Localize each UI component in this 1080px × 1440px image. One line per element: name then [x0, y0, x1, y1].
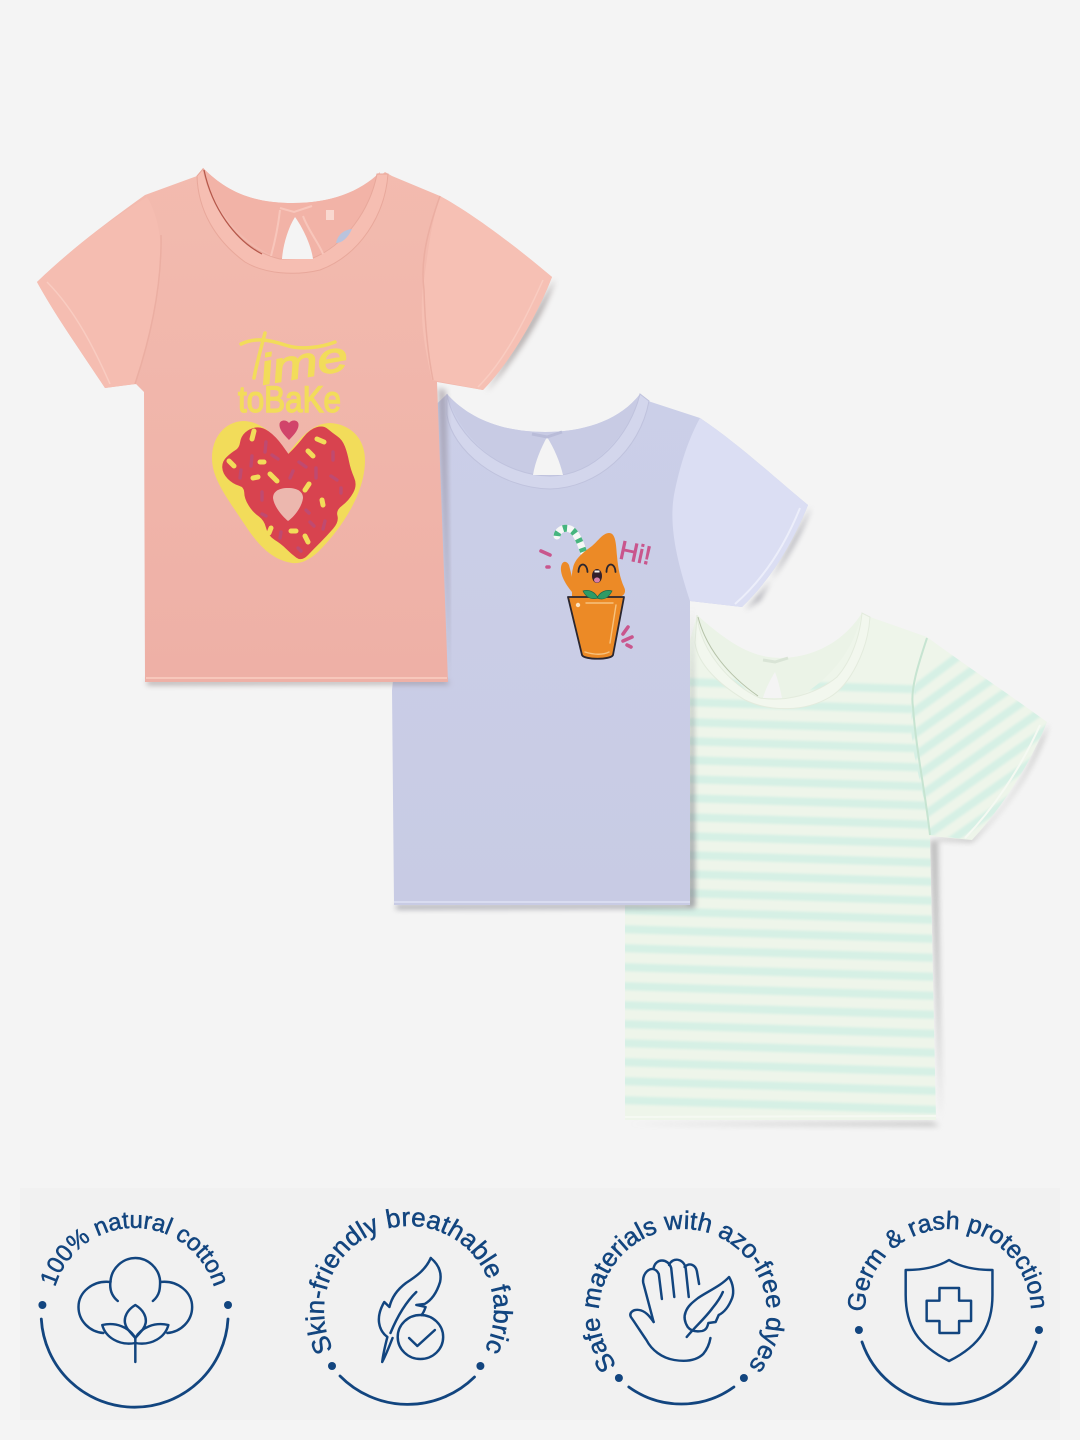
donut and lettering artwork	[212, 332, 365, 563]
mint back neck	[697, 613, 862, 698]
yellow sprinkles	[229, 431, 324, 542]
lavender sleeve	[672, 418, 808, 607]
size tag	[326, 210, 334, 220]
circular label: Germ & rash protection	[848, 1210, 1044, 1310]
Time to Bake lettering	[238, 332, 351, 420]
badge: safe materials with azo-free dyes	[582, 1210, 785, 1406]
circular label: Skin-friendly breathable fabric	[305, 1208, 514, 1354]
lavender back neck	[447, 394, 640, 478]
glass	[568, 597, 624, 659]
mint striped t-shirt	[620, 613, 1060, 1126]
small heart	[279, 420, 299, 440]
yellow heart	[212, 421, 365, 563]
icon: cotton boll	[79, 1258, 192, 1362]
Time to Bake lettering: toBaKe	[238, 379, 341, 420]
face	[578, 564, 616, 572]
keyhole	[282, 217, 313, 259]
lavender t-shirt	[392, 394, 811, 909]
panel: badge strip background	[20, 1188, 1060, 1420]
purple sprinkles	[240, 442, 341, 551]
lavender collar	[447, 394, 649, 489]
pink accent marks	[541, 551, 632, 647]
icon: feather with check	[379, 1258, 443, 1362]
badge: skin-friendly breathable fabric	[305, 1208, 514, 1406]
straw	[557, 528, 584, 553]
Time to Bake lettering: ime	[256, 332, 351, 394]
circular label: 100% natural cotton	[41, 1212, 226, 1286]
red icing	[223, 427, 355, 558]
mint collar	[695, 613, 870, 709]
circular label: Safe materials with azo-free dyes	[582, 1210, 785, 1372]
icon: shield with cross	[906, 1260, 992, 1361]
character	[572, 533, 625, 597]
mint sleeve stripes	[912, 656, 1046, 838]
badge: 100% natural cotton	[38, 1212, 232, 1409]
keyhole	[533, 437, 563, 475]
leaves	[583, 590, 612, 599]
keyhole	[763, 672, 782, 698]
pink collar	[197, 169, 388, 273]
mint body stripes	[620, 680, 940, 1110]
pink left sleeve	[37, 197, 161, 388]
badge: germ and rash protection	[848, 1210, 1044, 1406]
pink back neck	[203, 168, 380, 259]
juice artwork	[541, 528, 654, 659]
icon: hand and leaf	[630, 1260, 733, 1361]
Hi! text: Hi!	[617, 535, 654, 571]
pink right sleeve	[422, 196, 552, 390]
pink t-shirt	[37, 168, 555, 685]
donut hole	[273, 488, 303, 521]
